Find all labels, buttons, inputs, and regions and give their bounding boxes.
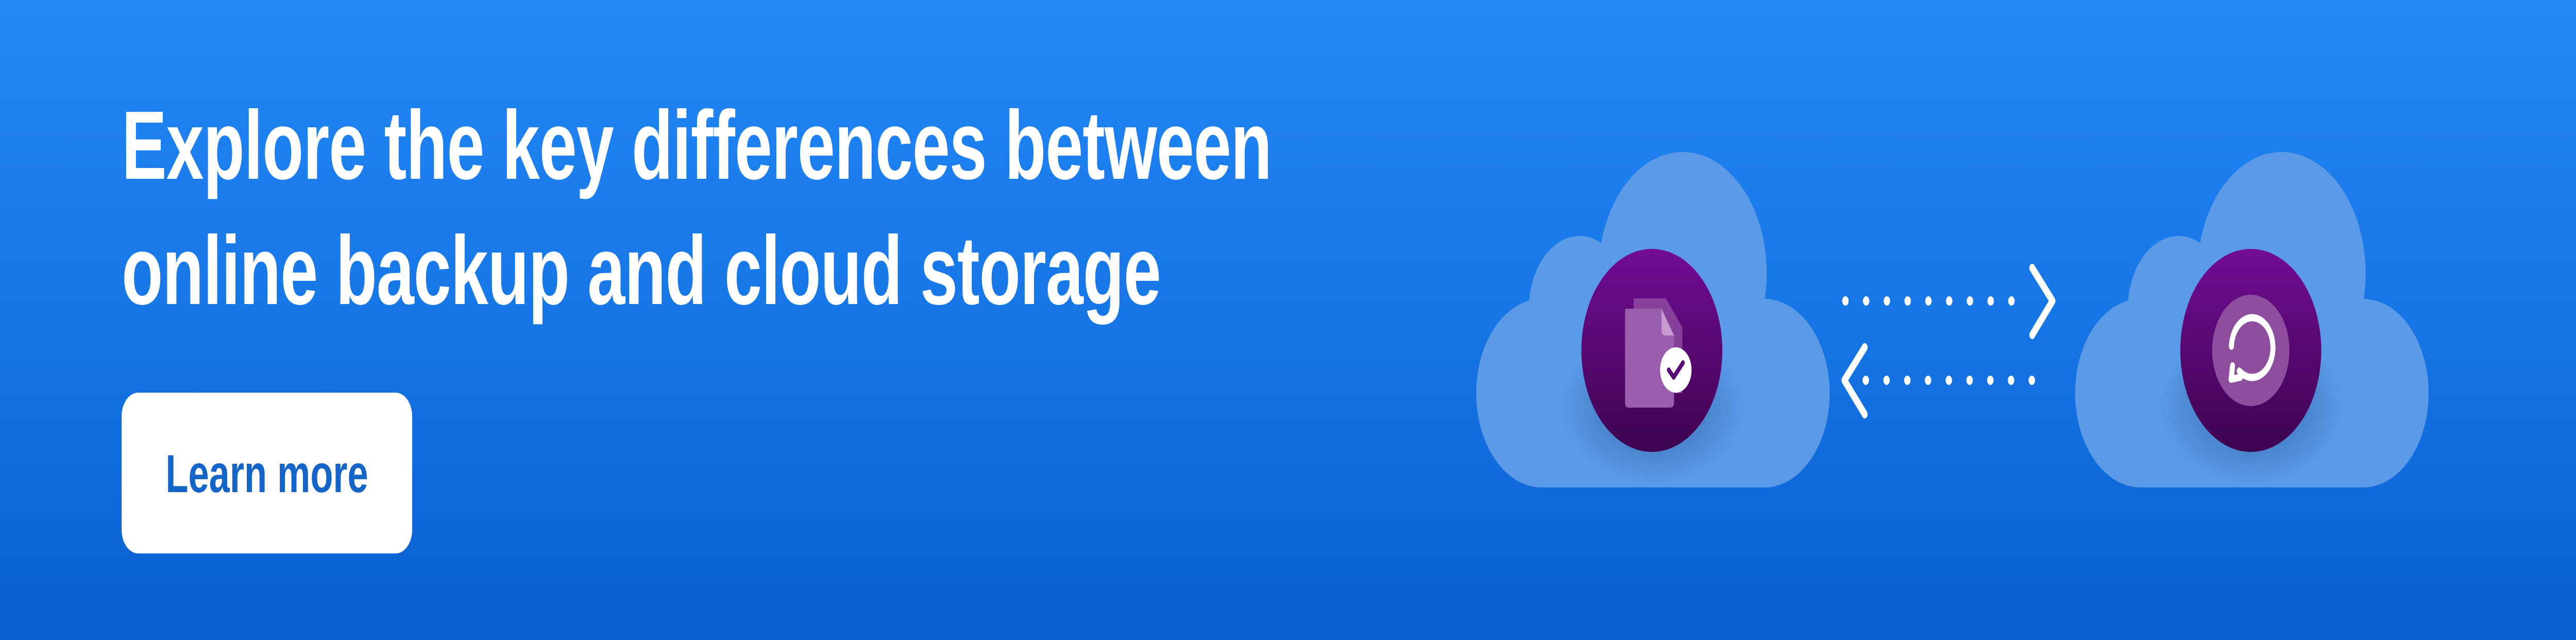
cloud shape left	[1476, 152, 1829, 487]
arrow: left dotted	[1844, 347, 2053, 414]
cloud left with file icon	[1476, 152, 1829, 487]
arrow: right dotted	[1845, 268, 2053, 335]
button: learn more	[122, 393, 412, 553]
title: Explore the key differences between	[122, 91, 1272, 200]
title: online backup and cloud storage	[122, 216, 1161, 325]
icon: purple circle refresh	[2180, 249, 2321, 452]
title	[122, 91, 1272, 325]
cloud shape right	[2075, 152, 2429, 487]
icon: purple circle file	[1581, 249, 1722, 452]
button: learn more: Learn more	[165, 444, 368, 503]
cloud right with refresh icon	[2075, 152, 2429, 487]
